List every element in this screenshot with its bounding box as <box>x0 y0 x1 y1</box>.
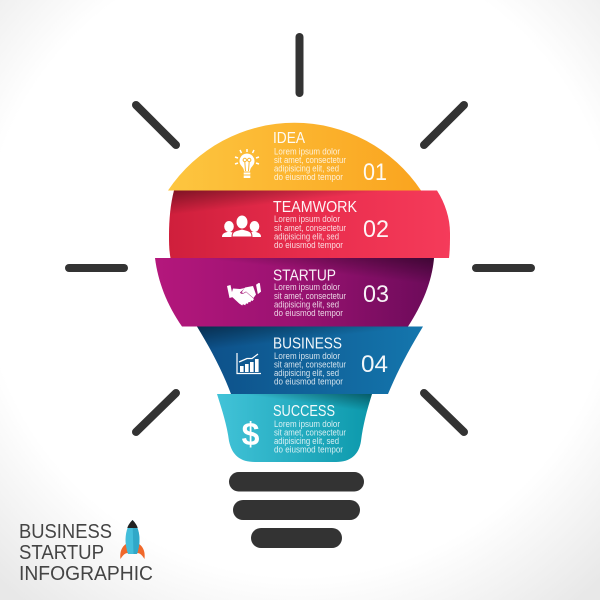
panel: business <box>197 326 423 394</box>
panel: idea <box>168 123 421 190</box>
heading and text: success: Lorem ipsum dolor <box>274 419 340 429</box>
footer title <box>19 521 153 585</box>
heading and text: teamwork: TEAMWORK <box>273 199 358 216</box>
heading and text: success: SUCCESS <box>273 403 335 420</box>
number 03: 03 <box>363 281 389 308</box>
heading and text: teamwork <box>273 199 358 250</box>
heading and text: success: sit amet, consectetur <box>274 428 346 438</box>
footer title: BUSINESS <box>19 521 112 543</box>
heading and text: success: adipisicing elit, sed <box>274 436 339 446</box>
bulb base bars <box>229 472 364 548</box>
icon: light bulb <box>235 149 259 178</box>
heading and text: startup <box>273 268 346 318</box>
heading and text: idea <box>273 130 346 182</box>
panel: teamwork <box>169 190 450 258</box>
heading and text: business: do eiusmod tempor <box>274 376 343 386</box>
heading and text: idea: Lorem ipsum dolor <box>274 146 340 156</box>
heading and text: business: sit amet, consectetur <box>274 360 346 370</box>
number 02: 02 <box>363 216 389 243</box>
heading and text: idea: do eiusmod tempor <box>274 172 343 182</box>
footer title: STARTUP <box>19 542 104 564</box>
heading and text: idea: IDEA <box>273 130 306 147</box>
heading and text: teamwork: sit amet, consectetur <box>274 223 346 233</box>
heading and text: business: BUSINESS <box>273 336 342 352</box>
footer title: INFOGRAPHIC <box>19 563 153 585</box>
heading and text: idea: adipisicing elit, sed <box>274 164 339 174</box>
icon: dollar: $ <box>242 416 260 452</box>
heading and text: success: do eiusmod tempor <box>274 444 343 454</box>
heading and text: teamwork: adipisicing elit, sed <box>274 232 339 242</box>
heading and text: startup: adipisicing elit, sed <box>274 300 339 310</box>
heading and text: teamwork: Lorem ipsum dolor <box>274 214 340 224</box>
number 04: 04 <box>361 351 388 378</box>
heading and text: startup: do eiusmod tempor <box>274 308 343 318</box>
heading and text: startup: sit amet, consectetur <box>274 291 346 301</box>
light rays <box>69 37 531 432</box>
heading and text: startup: Lorem ipsum dolor <box>274 282 340 292</box>
number 01: 01 <box>363 159 387 186</box>
heading and text: business: Lorem ipsum dolor <box>274 351 340 361</box>
icon: bar chart <box>237 353 261 374</box>
heading and text: business <box>273 336 346 386</box>
icon: rocket <box>120 520 145 559</box>
panel: startup <box>155 258 434 326</box>
icon: people <box>222 215 261 237</box>
heading and text: teamwork: do eiusmod tempor <box>274 240 343 250</box>
heading and text: success <box>273 403 346 454</box>
icon: handshake <box>227 283 261 306</box>
heading and text: startup: STARTUP <box>273 268 336 284</box>
panel: success <box>217 394 372 462</box>
heading and text: business: adipisicing elit, sed <box>274 368 339 378</box>
heading and text: idea: sit amet, consectetur <box>274 155 346 165</box>
